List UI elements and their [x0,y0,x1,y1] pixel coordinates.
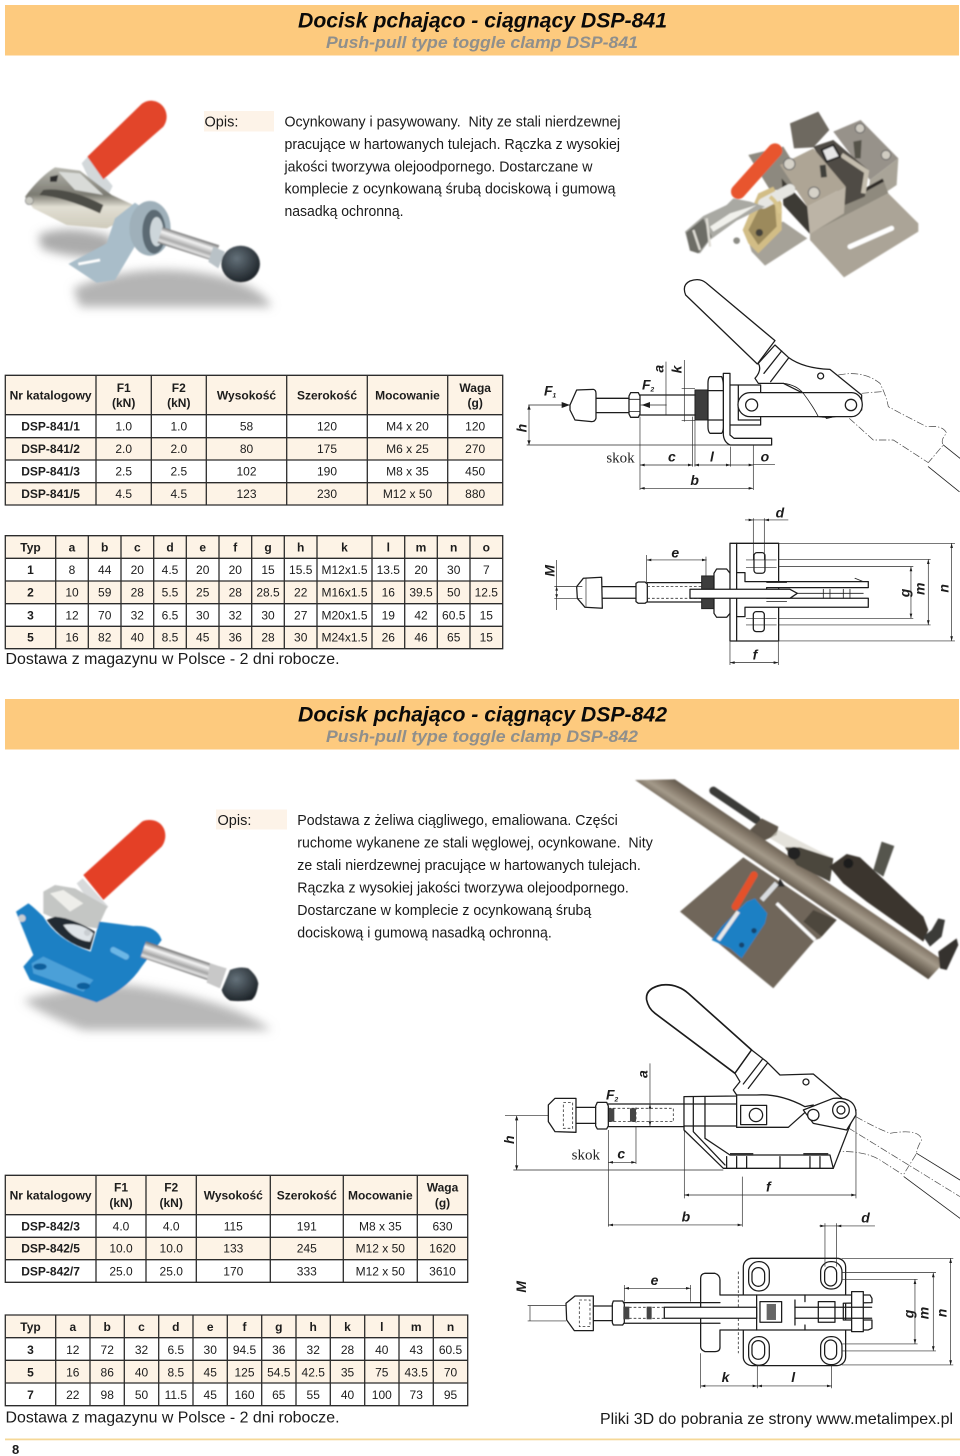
delivery note: DSP-842: Dostawa z magazynu w Polsce - 2 dni robocze. [6,1410,340,1426]
table: DSP-841 catalogue numbers: DSP-841/3 [21,465,80,479]
table: DSP-841 dimensions: 28 [229,586,242,600]
table: DSP-842 catalogue numbers: F2 [164,1180,179,1194]
table: DSP-841 catalogue numbers: Szerokość [297,388,357,402]
table: DSP-842 dimensions: 6.5 [167,1343,184,1357]
table: DSP-841 dimensions: 30 [294,631,308,645]
table: DSP-841 catalogue numbers: 102 [236,465,257,479]
dimension labels: f [766,1179,772,1195]
description text: DSP-842: Rączka z wysokiej jakości tworzywa olejoodpornego. [297,880,629,896]
table: DSP-842 dimensions: 32 [307,1343,320,1357]
table: DSP-842 dimensions: 16 [66,1365,80,1379]
description text: DSP-841 [284,114,620,220]
table: DSP-842 dimensions: 55 [307,1388,320,1402]
table: DSP-842 catalogue numbers: 133 [223,1242,244,1256]
base bracket [730,385,761,425]
table: DSP-842 dimensions: 86 [101,1365,114,1379]
table: DSP-841 dimensions: f [233,541,238,555]
side view [514,280,960,492]
table: DSP-842 dimensions: 7 [27,1388,34,1402]
table: DSP-841 catalogue numbers: 880 [465,487,486,501]
table: DSP-842 catalogue numbers: 191 [297,1219,317,1233]
table: DSP-842 catalogue numbers: 245 [297,1242,317,1256]
table: DSP-841 dimensions: 25 [196,586,210,600]
table: DSP-841 catalogue numbers: DSP-841/1 [21,419,80,433]
dimension labels: F [544,382,553,398]
table: DSP-841 catalogue numbers: 123 [236,487,257,501]
table: DSP-842 catalogue numbers: 10.0 [160,1242,183,1256]
table: DSP-841 dimensions: 22 [294,586,308,600]
table: DSP-841 dimensions: o [483,541,490,555]
table: DSP-841 dimensions: M16x1.5 [321,586,368,600]
handle [646,985,752,1073]
table: DSP-842 catalogue numbers: 170 [223,1265,244,1279]
table: DSP-841 dimensions: 28 [261,631,275,645]
dimension labels, top view: f [753,646,759,662]
dimension labels, top view: d [776,505,785,521]
table: DSP-842 dimensions: 45 [204,1365,217,1379]
table: DSP-841 dimensions: 32 [131,608,144,622]
dimension labels: b [682,1209,691,1225]
dimension labels, top view: m [916,1307,932,1319]
dimension labels: h [501,1135,517,1144]
table: DSP-841 dimensions: 13.5 [377,563,400,577]
table: DSP-842 dimensions: 28 [341,1343,354,1357]
table: DSP-841 dimensions: 2 [27,586,34,600]
table: DSP-841 dimensions: 50 [447,586,461,600]
dimension labels [501,1070,772,1225]
dimension labels, top view: M [513,1281,529,1293]
table: DSP-841 dimensions: b [101,541,108,555]
table: DSP-841 dimensions: 19 [382,608,395,622]
table: DSP-841 dimensions: M24x1.5 [321,631,368,645]
table: DSP-841 dimensions: 12.5 [475,586,498,600]
table: DSP-841 dimensions: 60.5 [442,608,466,622]
dimension labels: skok [606,451,635,467]
dimension labels, top view: l [791,1369,796,1385]
dimension labels: o [761,449,770,465]
table: DSP-841 dimensions: 30 [196,608,210,622]
table: DSP-841 dimensions: 20 [131,563,144,577]
table: DSP-841 catalogue numbers: 175 [317,442,337,456]
table: DSP-841 dimensions: 65 [447,631,461,645]
table: DSP-841 dimensions: c [134,541,141,555]
table: DSP-842 dimensions [5,1315,468,1406]
dimension labels: F [642,376,651,392]
description label: Opis (DSP-842) [216,810,287,830]
table: DSP-842 dimensions: 45 [204,1388,217,1402]
dimension labels: h [514,424,530,432]
table: DSP-842 catalogue numbers: 115 [224,1219,243,1233]
table: DSP-841 dimensions: 42 [414,608,428,622]
table: DSP-842 dimensions: 5 [27,1365,34,1379]
table: DSP-842 dimensions: 65 [272,1388,286,1402]
table: DSP-841 catalogue numbers: DSP-841/2 [21,442,80,456]
table: DSP-842 dimensions: 73 [410,1388,423,1402]
table: DSP-842 dimensions: Typ [20,1320,41,1334]
table: DSP-842 catalogue numbers: F1 [114,1180,128,1194]
dimension labels, top view: e [651,1272,659,1288]
table: DSP-842 catalogue numbers: Szerokość [277,1188,337,1202]
header band: DSP-841 [5,5,959,56]
table: DSP-841 dimensions: m [416,541,426,555]
table: DSP-841 catalogue numbers: DSP-841/5 [21,487,80,501]
table: DSP-841 dimensions: 16 [382,586,395,600]
table: DSP-841 dimensions: g [264,541,272,555]
table: DSP-842 catalogue numbers: (kN) [160,1196,183,1210]
table: DSP-841 catalogue numbers: 2.0 [170,442,187,456]
table: DSP-841 dimensions: 15 [480,608,493,622]
table: DSP-841 catalogue numbers: 80 [240,442,253,456]
table: DSP-841 catalogue numbers: (g) [468,396,483,410]
table: DSP-842 dimensions: 43.5 [405,1365,428,1379]
table: DSP-841 dimensions: 7 [483,563,490,577]
table: DSP-841 catalogue numbers: 1.0 [115,419,132,433]
description text: DSP-841: pracujące w hartowanych tulejach. Rączka z wysokiej [284,137,620,153]
table: DSP-841 dimensions: 6.5 [162,608,179,622]
table: DSP-842 dimensions: d [172,1320,179,1334]
table: DSP-841 catalogue numbers: M4 x 20 [386,419,429,433]
table: DSP-842 dimensions: 95 [444,1388,457,1402]
table: DSP-842 dimensions: 60.5 [439,1343,463,1357]
table: DSP-841 dimensions: 28 [131,586,144,600]
table: DSP-842 catalogue numbers: Waga [427,1180,459,1194]
table: DSP-842 catalogue numbers: Mocowanie [348,1188,413,1202]
table: DSP-841 dimensions: 12 [65,608,79,622]
header band: DSP-842 [5,699,959,750]
table: DSP-841 catalogue numbers: 450 [465,465,486,479]
photo: DSP-841 mounted on fixture [685,112,918,277]
table: DSP-841 dimensions: h [297,541,304,555]
table: DSP-842 catalogue numbers: 1620 [429,1242,456,1256]
side view [501,985,960,1227]
table: DSP-841 dimensions: a [69,541,76,555]
description text: DSP-841: nasadką ochronną. [284,204,404,220]
table: DSP-842 dimensions: 3 [27,1343,34,1357]
table: DSP-842 catalogue numbers: (g) [435,1196,450,1210]
table: DSP-841 catalogue numbers: Mocowanie [375,388,440,402]
table: DSP-841 dimensions: 3 [27,608,34,622]
table: DSP-841 catalogue numbers: 120 [465,419,486,433]
table: DSP-842 catalogue numbers [5,1175,468,1282]
dimension labels [514,364,770,488]
dimension labels: k [668,364,684,373]
table: DSP-841 dimensions: e [199,541,206,555]
table: DSP-842 dimensions: l [380,1320,383,1334]
dimension labels, top view: k [722,1369,731,1385]
title: DSP-841: Docisk pchająco - ciągnący DSP-841 [298,10,667,32]
description label: Opis (DSP-842): Opis: [218,813,251,829]
table: DSP-842 dimensions: 70 [444,1365,457,1379]
table: DSP-842 catalogue numbers: DSP-842/7 [21,1265,80,1279]
table: DSP-841 dimensions: 5.5 [162,586,179,600]
table: DSP-841 dimensions: M20x1.5 [321,608,368,622]
table: DSP-842 catalogue numbers: 4.0 [163,1219,180,1233]
table: DSP-842 catalogue numbers: 10.0 [109,1242,133,1256]
download note: 3D files: Pliki 3D do pobrania ze strony www.metalimpex.pl [600,1411,953,1428]
table: DSP-842 dimensions: 42.5 [302,1365,325,1379]
table: DSP-842 dimensions: 8.5 [167,1365,184,1379]
dimension labels, top view: n [935,584,951,593]
table: DSP-842 catalogue numbers: M12 x 50 [356,1265,405,1279]
table: DSP-841 dimensions: M12x1.5 [321,563,368,577]
description text: DSP-841: jakości tworzywa olejoodpornego. Dostarczane w [284,160,593,176]
description text: DSP-841: komplecie z ocynkowaną śrubą dociskową i gumową [284,182,616,198]
table: DSP-841 catalogue numbers: F1 [117,381,131,395]
dimension labels, top view [542,505,951,662]
title: DSP-842: Docisk pchająco - ciągnący DSP-842 [298,704,667,726]
table: DSP-841 catalogue numbers: 270 [465,442,486,456]
table: DSP-842 dimensions: 11.5 [165,1388,187,1402]
table: DSP-841 catalogue numbers: 120 [317,419,337,433]
dimension labels: c [617,1146,625,1162]
dimension labels, top view: g [896,588,912,598]
table: DSP-842 dimensions: n [447,1320,454,1334]
description text: DSP-841: Ocynkowany i pasywowany. Nity ze stali nierdzewnej [284,114,620,130]
description label: Opis (DSP-841): Opis: [204,114,238,130]
table: DSP-842 dimensions: 40 [375,1343,389,1357]
description text: DSP-842 [297,813,654,941]
table: DSP-842 catalogue numbers: Wysokość [204,1188,263,1202]
table: DSP-842 dimensions: k [344,1320,351,1334]
dimension labels, top view: n [934,1309,950,1317]
table: DSP-841 dimensions: 10 [65,586,79,600]
dimension labels, top view: d [861,1210,870,1226]
table: DSP-842 dimensions: 36 [272,1343,286,1357]
table: DSP-841 dimensions: 4.5 [162,563,179,577]
photo: blue toggle clamp DSP-842 [16,820,272,1030]
hand outline [838,374,947,463]
dimension labels, top view: g [900,1309,916,1319]
subtitle: DSP-841: Push-pull type toggle clamp DSP-841 [326,33,638,52]
table: DSP-841 dimensions: 20 [229,563,242,577]
table: DSP-841 catalogue numbers: M12 x 50 [383,487,433,501]
description text: DSP-842: ruchome wykanene ze stali węglowej, ocynkowane. Nity [297,836,654,852]
table: DSP-842 dimensions: b [104,1320,111,1334]
dimension labels, top view [513,1210,950,1385]
table: DSP-842 dimensions: c [138,1320,145,1334]
table: DSP-842 dimensions: 35 [341,1365,354,1379]
photo: zinc toggle clamp DSP-841 [25,101,272,307]
table: DSP-841 dimensions: 8 [69,563,76,577]
table: DSP-842 catalogue numbers: M8 x 35 [359,1219,402,1233]
table: DSP-841 dimensions: l [387,541,390,555]
table: DSP-842 dimensions: 100 [372,1388,392,1402]
table: DSP-842 catalogue numbers: 4.0 [113,1219,130,1233]
dimension labels: F [606,1086,615,1102]
table: DSP-842 dimensions: 160 [234,1388,255,1402]
table: DSP-841 catalogue numbers: (kN) [112,396,135,410]
table: DSP-841 catalogue numbers: M6 x 25 [386,442,429,456]
table: DSP-842 catalogue numbers: 3610 [429,1265,456,1279]
table: DSP-841 dimensions: 36 [229,631,242,645]
table: DSP-841 dimensions: Typ [20,541,41,555]
table: DSP-842 dimensions: 40 [135,1365,148,1379]
dimension labels: 1 [553,392,557,399]
table: DSP-842 dimensions: 40 [341,1388,354,1402]
table: DSP-841 catalogue numbers [5,375,503,505]
table: DSP-841 catalogue numbers: M8 x 35 [386,465,429,479]
description text: DSP-842: dociskową i gumową nasadką ochronną. [297,925,552,941]
delivery note: DSP-841: Dostawa z magazynu w Polsce - 2 dni robocze. [6,651,340,668]
table: DSP-842 dimensions: 75 [375,1365,389,1379]
technical drawing: DSP-842 side and top views [501,985,960,1388]
table: DSP-841 dimensions: n [450,541,457,555]
table: DSP-842 dimensions: 30 [204,1343,217,1357]
table: DSP-841 catalogue numbers: 2.0 [115,442,132,456]
table: DSP-841 catalogue numbers: Waga [459,381,491,395]
table: DSP-842 catalogue numbers: 630 [432,1219,453,1233]
table: DSP-841 catalogue numbers: Wysokość [217,388,276,402]
table: DSP-841 catalogue numbers: (kN) [167,396,190,410]
table: DSP-841 catalogue numbers: 230 [317,487,337,501]
table: DSP-841 dimensions: 26 [382,631,395,645]
table: DSP-842 dimensions: 43 [410,1343,423,1357]
dimension labels, top view: M [542,565,558,577]
table: DSP-842 dimensions: 94.5 [233,1343,257,1357]
table: DSP-841 dimensions: 82 [98,631,112,645]
table: DSP-841 dimensions: 5 [27,631,34,645]
dimension labels: l [710,449,715,465]
table: DSP-842 dimensions: 32 [135,1343,148,1357]
dimension labels: c [668,449,676,465]
table: DSP-842 catalogue numbers: (kN) [109,1196,133,1210]
table: DSP-841 dimensions: 8.5 [162,631,179,645]
plunger [608,1104,684,1127]
top view [513,1210,953,1388]
table: DSP-841 dimensions: 70 [98,608,112,622]
table: DSP-841 dimensions: 28.5 [256,586,280,600]
table: DSP-842 catalogue numbers: 333 [297,1265,317,1279]
table: DSP-841 catalogue numbers: 58 [240,419,253,433]
description label: Opis (DSP-841) [204,111,274,132]
table: DSP-841 dimensions [5,536,503,649]
dimension labels, top view: m [912,583,928,595]
table: DSP-842 dimensions: a [69,1320,76,1334]
table: DSP-841 dimensions: 30 [261,608,275,622]
table: DSP-841 dimensions: 20 [196,563,210,577]
table: DSP-842 catalogue numbers: DSP-842/3 [21,1219,80,1233]
table: DSP-841 dimensions: 1 [27,563,34,577]
table: DSP-841 catalogue numbers: 2.5 [170,465,187,479]
table: DSP-841 catalogue numbers: 2.5 [115,465,132,479]
dimension labels: 2 [614,1096,619,1103]
table: DSP-841 catalogue numbers: Nr katalogowy [10,388,92,402]
table: DSP-841 dimensions: 59 [98,586,112,600]
table: DSP-842 catalogue numbers: 25.0 [109,1265,133,1279]
dimension labels: b [690,472,699,488]
table: DSP-842 dimensions: e [207,1320,214,1334]
dimension labels: skok [572,1147,600,1163]
table: DSP-842 dimensions: 125 [234,1365,255,1379]
hand outline [665,1015,960,1197]
table: DSP-841 dimensions: 20 [414,563,428,577]
table: DSP-841 catalogue numbers: 4.5 [170,487,187,501]
technical drawing: DSP-841 side and top views [514,280,960,665]
threaded stud [695,390,708,420]
table: DSP-841 dimensions: 27 [294,608,308,622]
table: DSP-842 dimensions: h [310,1320,317,1334]
table: DSP-841 dimensions: 15 [261,563,275,577]
dimension labels: a [650,365,666,373]
table: DSP-842 dimensions: 22 [66,1388,80,1402]
subtitle: DSP-842: Push-pull type toggle clamp DSP-842 [326,727,639,746]
table: DSP-842 dimensions: 98 [101,1388,114,1402]
table: DSP-841 dimensions: 30 [447,563,461,577]
table: DSP-841 dimensions: 40 [131,631,144,645]
table: DSP-841 catalogue numbers: 190 [317,465,337,479]
table: DSP-841 dimensions: 45 [196,631,210,645]
description text: DSP-842: Dostarczane w komplecie z ocynkowaną śrubą [297,903,591,919]
table: DSP-842 dimensions: f [242,1320,248,1334]
table: DSP-842 dimensions: m [411,1320,422,1334]
table: DSP-842 dimensions: 54.5 [267,1365,291,1379]
table: DSP-841 catalogue numbers: 4.5 [115,487,132,501]
table: DSP-842 catalogue numbers: Nr katalogowy [10,1188,92,1202]
table: DSP-841 dimensions: 39.5 [409,586,433,600]
table: DSP-842 catalogue numbers: DSP-842/5 [21,1242,80,1256]
description text: DSP-842: Podstawa z żeliwa ciągliwego, emaliowana. Części [297,813,618,829]
dimension labels: a [634,1070,650,1078]
table: DSP-841 dimensions: 32 [229,608,242,622]
table: DSP-841 catalogue numbers: 1.0 [170,419,187,433]
table: DSP-842 dimensions: 12 [66,1343,80,1357]
table: DSP-842 dimensions: 72 [101,1343,114,1357]
table: DSP-841 dimensions: d [166,541,174,555]
handle [684,280,775,364]
table: DSP-841 catalogue numbers: F2 [172,381,186,395]
dimension labels: 2 [650,386,655,393]
top view [542,505,955,665]
table: DSP-841 dimensions: k [341,541,348,555]
photo: DSP-842 mounted on steel fixture [635,779,958,988]
table: DSP-841 dimensions: 44 [98,563,112,577]
table: DSP-842 catalogue numbers: 25.0 [160,1265,183,1279]
description text: DSP-842: ze stali nierdzewnej pracujące w hartowanych tulejach. [297,858,641,874]
table: DSP-841 dimensions: 16 [65,631,79,645]
dimension labels, top view: e [671,544,679,560]
table: DSP-841 dimensions: 15.5 [289,563,313,577]
body [684,1097,833,1168]
table: DSP-841 dimensions: 15 [480,631,493,645]
table: DSP-842 dimensions: 50 [135,1388,148,1402]
table: DSP-842 dimensions: g [275,1320,282,1334]
table: DSP-842 catalogue numbers: M12 x 50 [356,1242,405,1256]
table: DSP-841 dimensions: 46 [414,631,428,645]
